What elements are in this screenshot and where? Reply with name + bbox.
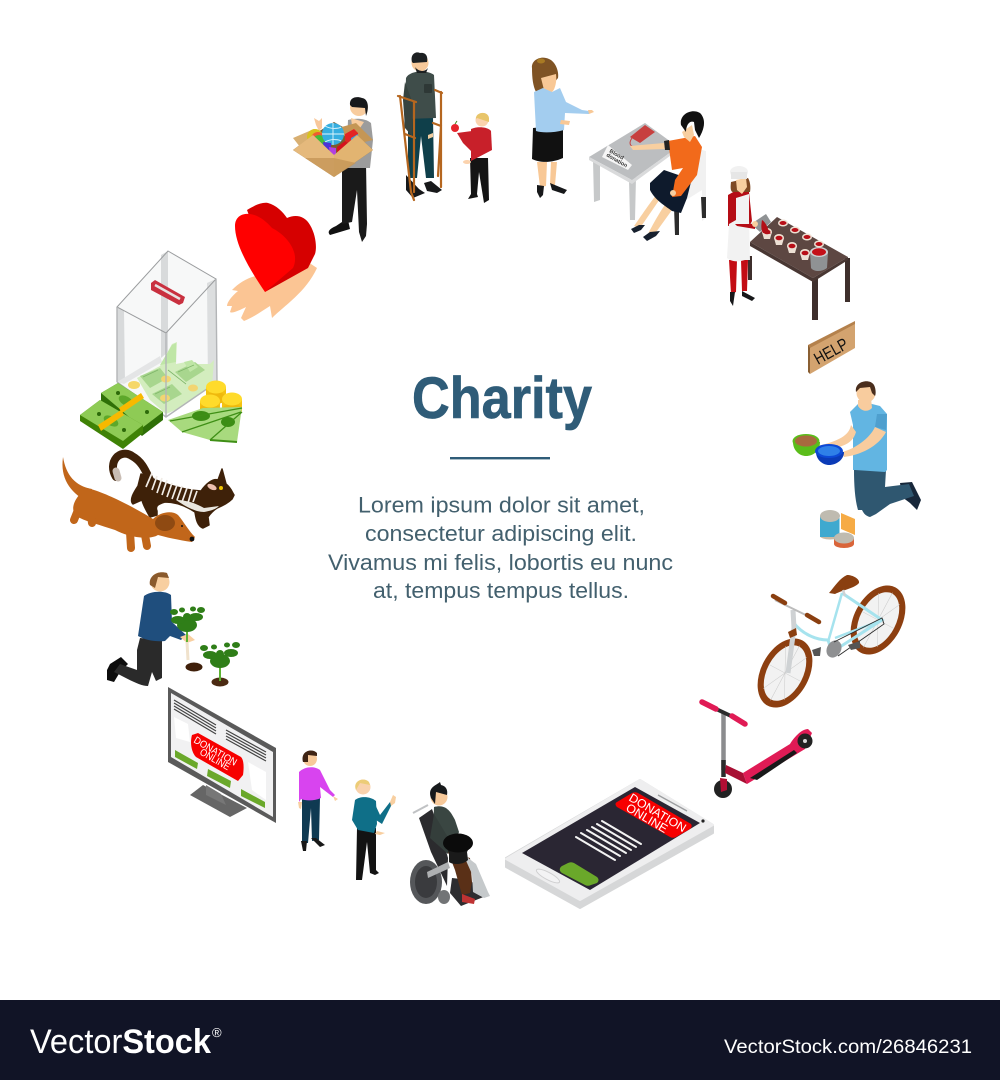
monitor stand	[190, 785, 247, 817]
icon: smartphone donation	[506, 780, 713, 908]
icon: dachshund dog	[62, 457, 195, 548]
back brick	[101, 383, 163, 436]
icon: cat	[113, 454, 234, 528]
gold coins	[200, 380, 242, 416]
figure: woman in magenta	[298, 750, 338, 851]
crutches	[398, 90, 442, 200]
body text: Vivamus mi felis, lobortis eu nunc	[328, 550, 673, 575]
figure: blood donation table	[589, 111, 706, 241]
title: Charity	[412, 366, 592, 431]
top hat	[443, 834, 473, 864]
body text: Lorem ipsum dolor sit amet,	[358, 492, 645, 518]
rear wheel	[839, 576, 917, 664]
man	[107, 657, 128, 682]
slot	[151, 280, 185, 305]
figure: man feeding pets	[792, 381, 921, 548]
footer banner: ®	[212, 1025, 222, 1040]
transparent box	[117, 251, 217, 417]
figure: woman in blue	[532, 58, 594, 198]
figure: man planting trees	[107, 572, 240, 686]
body text	[328, 492, 673, 603]
pet food cans	[820, 510, 855, 548]
seated woman	[634, 190, 672, 235]
red button: ONLINE	[198, 747, 232, 773]
image id: VectorStock.com/26846231	[724, 1037, 972, 1058]
fanned banknotes	[168, 407, 242, 442]
heart	[247, 203, 316, 292]
monitor frame	[168, 687, 276, 823]
sapling in ground	[200, 642, 240, 686]
sign: blood donation: donation	[605, 153, 629, 170]
sign: help: HELP	[811, 334, 851, 368]
icon: kick scooter	[702, 702, 812, 798]
front wheel	[746, 629, 824, 717]
cook	[727, 166, 758, 306]
table	[593, 160, 636, 220]
icon: donation box with money	[80, 251, 242, 449]
sign: blood donation: Blood	[608, 149, 625, 162]
body text: at, tempus tempus tellus.	[373, 578, 629, 603]
figure: man in wheelchair	[410, 782, 490, 906]
figure: cook serving soup	[727, 166, 850, 320]
sign: help	[808, 321, 855, 374]
man	[900, 482, 921, 510]
red banner: DONATION	[626, 791, 689, 835]
logo: VectorStock	[30, 1023, 211, 1061]
soup table	[748, 214, 850, 320]
figure: man on crutches	[398, 52, 442, 200]
cardboard box	[293, 122, 373, 177]
sapling with roots	[170, 606, 205, 660]
figure: boy in teal	[352, 780, 396, 880]
red banner: ONLINE	[623, 801, 670, 836]
money inside box	[128, 342, 214, 414]
text lines	[174, 700, 266, 761]
green buttons	[175, 750, 265, 808]
sign: blood donation	[602, 145, 632, 170]
figure: man holding donation box	[293, 97, 373, 242]
icon: monitor donation online	[168, 687, 276, 823]
hand	[227, 262, 317, 321]
red button: DONATION	[192, 735, 239, 769]
green button	[560, 862, 598, 886]
bowls	[792, 434, 844, 465]
icon: bicycle	[746, 575, 917, 717]
icon: heart in hand	[227, 203, 317, 321]
front brick	[80, 400, 143, 449]
footer banner	[0, 1000, 1000, 1080]
phone screen	[522, 787, 700, 890]
chair	[675, 150, 706, 221]
body text: consectetur adipiscing elit.	[365, 521, 637, 546]
text lines	[576, 821, 641, 860]
figure: boy with apple	[451, 113, 492, 203]
frame	[793, 593, 882, 652]
wheelchair	[410, 805, 486, 906]
banknote stacks	[80, 383, 163, 449]
